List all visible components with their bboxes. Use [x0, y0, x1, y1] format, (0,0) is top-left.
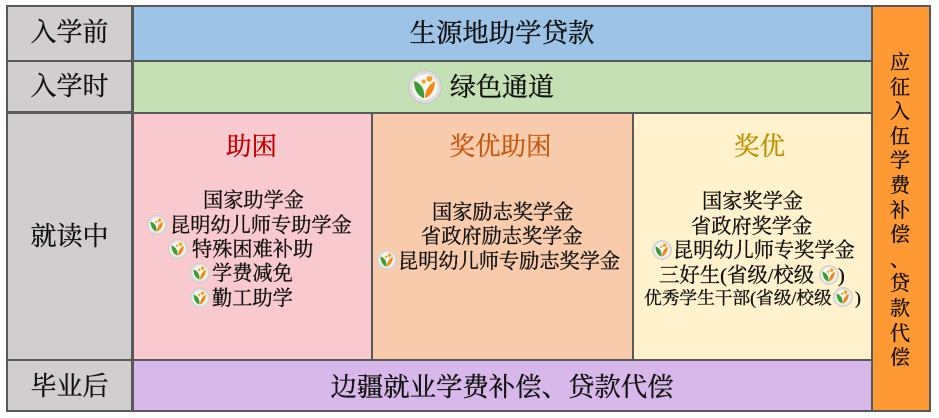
item: 昆明幼儿师专励志奖学金: 昆明幼儿师专励志奖学金	[398, 251, 620, 273]
text: 应征入伍学费补偿、贷款代偿 vertical: 偿	[890, 347, 910, 369]
icon: logo	[190, 263, 210, 283]
heading: 入学时: 入学时	[30, 72, 108, 101]
panel: enrolment band	[132, 60, 873, 114]
icon: logo	[147, 215, 167, 235]
heading: 奖优助困: 奖优助困	[449, 132, 552, 161]
heading: 毕业后: 毕业后	[30, 372, 108, 401]
panel: row label 入学时	[6, 60, 133, 113]
text: 应征入伍学费补偿、贷款代偿 vertical: 伍	[890, 126, 910, 148]
icon: logo	[652, 240, 672, 260]
text: 应征入伍学费补偿、贷款代偿 vertical: 、	[890, 249, 910, 271]
item: 特殊困难补助: 特殊困难补助	[192, 239, 313, 261]
icon: logo	[833, 287, 853, 307]
text: 绿色通道: 绿色通道	[450, 73, 554, 102]
item: 省政府励志奖学金: 省政府励志奖学金	[421, 226, 583, 248]
panel: 奖优 column	[632, 112, 873, 361]
item: 学费减免: 学费减免	[212, 263, 293, 285]
text: 应征入伍学费补偿、贷款代偿 vertical: 学	[890, 150, 910, 172]
text: 应征入伍学费补偿、贷款代偿 vertical: 补	[890, 200, 910, 222]
icon: logo	[190, 288, 210, 308]
text: 生源地助学贷款: 生源地助学贷款	[410, 18, 594, 48]
text: 应征入伍学费补偿、贷款代偿 vertical: 偿	[890, 224, 910, 246]
text: 应征入伍学费补偿、贷款代偿 vertical: 应	[890, 52, 910, 74]
item: 国家助学金: 国家助学金	[203, 190, 304, 212]
text: 应征入伍学费补偿、贷款代偿 vertical: 入	[890, 101, 910, 123]
text: 边疆就业学费补偿、贷款代偿: 边疆就业学费补偿、贷款代偿	[330, 372, 674, 402]
closing bracket: )	[855, 288, 861, 308]
text: 应征入伍学费补偿、贷款代偿 vertical: 贷	[890, 273, 910, 295]
icon: logo	[819, 265, 839, 285]
item: 国家奖学金: 国家奖学金	[702, 191, 803, 213]
panel: 奖优助困 column	[371, 112, 634, 361]
item: 三好生(省级/校级): 三好生(省级/校级	[659, 265, 814, 287]
panel: conscription side column	[871, 5, 931, 412]
panel: pre-enrolment band	[132, 5, 873, 62]
text: 应征入伍学费补偿、贷款代偿 vertical: 款	[890, 298, 910, 320]
heading: 入学前: 入学前	[30, 18, 108, 47]
text block: 奖优助困 items	[377, 201, 620, 273]
icon: logo	[377, 250, 397, 270]
item: 勤工助学: 勤工助学	[212, 288, 293, 310]
item: 国家励志奖学金: 国家励志奖学金	[432, 202, 573, 224]
icon: logo	[168, 239, 188, 259]
heading: 就读中: 就读中	[30, 222, 108, 251]
panel: row label 就读中	[6, 112, 133, 361]
item: 省政府奖学金: 省政府奖学金	[691, 216, 812, 238]
text: 应征入伍学费补偿、贷款代偿 vertical: 代	[890, 323, 910, 345]
panel: row label 入学前	[6, 5, 133, 61]
item: 昆明幼儿师专奖学金: 昆明幼儿师专奖学金	[673, 240, 855, 262]
panel: 助困 column	[132, 112, 373, 361]
panel: row label 毕业后	[6, 359, 133, 412]
closing bracket: )	[838, 265, 845, 287]
heading: 助困: 助困	[226, 132, 277, 161]
text: 应征入伍学费补偿、贷款代偿 vertical: 征	[890, 77, 910, 99]
text: 应征入伍学费补偿、贷款代偿 vertical	[890, 52, 910, 369]
text: 应征入伍学费补偿、贷款代偿 vertical: 费	[890, 175, 910, 197]
heading: 奖优: 奖优	[734, 132, 785, 161]
text block: 助困 items	[147, 189, 352, 310]
item: 优秀学生干部(省级/校级): 优秀学生干部(省级/校级	[644, 288, 832, 308]
item: 昆明幼儿师专助学金: 昆明幼儿师专助学金	[170, 215, 352, 237]
text block: 奖优 items	[644, 190, 861, 308]
icon: school logo large	[408, 70, 442, 104]
panel: graduation band	[132, 359, 873, 412]
